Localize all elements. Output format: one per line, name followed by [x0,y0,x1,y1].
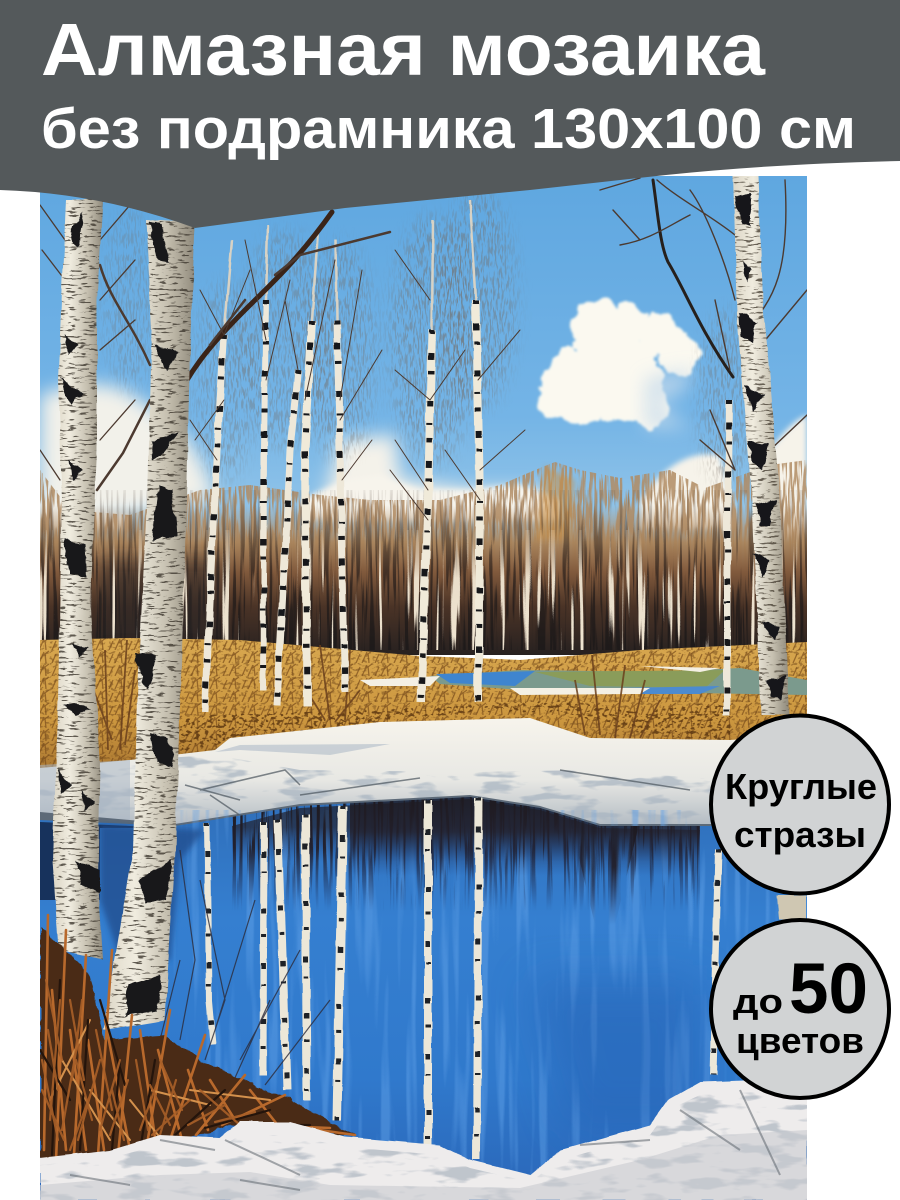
grass bank bottom-left [40,915,355,1165]
feathery tree crowns [104,190,755,490]
pond water [40,796,807,1200]
birch reflections in water [207,798,719,1160]
badge: up to 50 colours: цветов [736,1020,864,1061]
front snow bank [40,1080,807,1200]
dark twigs over water [160,850,330,1100]
title line 1: Алмазная мозаика [41,8,766,91]
left birch [52,200,103,960]
distant birch forest [40,460,807,655]
header banner [0,0,900,228]
forest reflection [232,796,700,925]
golden meadow [40,638,807,775]
badge: round rhinestones [711,716,889,894]
right birch [733,176,807,920]
painting: birch forest by a spring pond [40,176,807,1200]
snow bank [40,718,736,826]
bare branches [40,178,807,520]
badge: round rhinestones: стразы [734,814,866,855]
badge: up to 50 colours [711,920,889,1098]
main front birch [103,220,195,1030]
badge: up to 50 colours: 50 [789,950,868,1029]
thin birch trunks [205,200,729,715]
sky [40,176,807,576]
badge: round rhinestones: Круглые [725,766,877,807]
title line 2: без подрамника 130x100 см [41,97,856,161]
clouds [40,300,807,540]
badge: up to 50 colours: до [733,983,783,1021]
